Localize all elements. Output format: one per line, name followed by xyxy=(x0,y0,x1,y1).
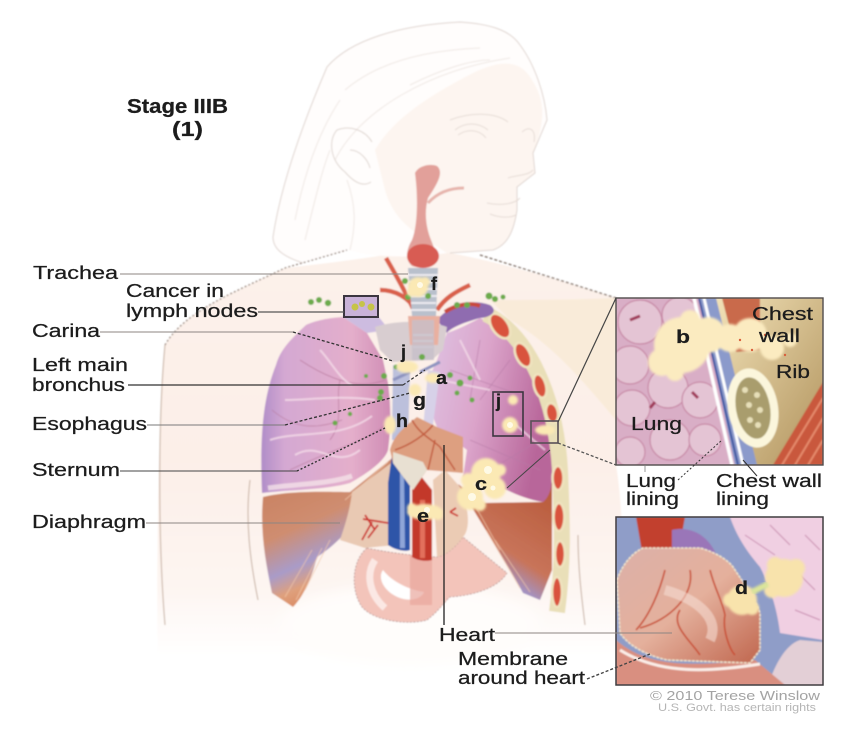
copyright credit xyxy=(650,688,821,714)
tumor b xyxy=(648,310,797,381)
tumor site letters: b xyxy=(676,327,690,347)
anatomy labels, bottom and right: Lung xyxy=(631,414,682,434)
anatomy labels, left column: Carina xyxy=(32,321,101,341)
diaphragm, left side xyxy=(262,455,396,607)
left lung apex vessels xyxy=(343,302,388,333)
vena cava xyxy=(388,455,410,551)
chest wall lining xyxy=(700,298,757,465)
tumors: cream-yellow cancer clusters xyxy=(384,277,555,520)
tumor site letters: d xyxy=(735,578,748,598)
leader lines xyxy=(100,274,757,679)
heading: Stage IIIB (1): (1) xyxy=(172,119,203,141)
rib muscle xyxy=(773,382,823,465)
body silhouette xyxy=(157,250,623,670)
anatomy labels, bottom and right: Rib xyxy=(776,362,810,382)
anatomy labels, left column: Trachea xyxy=(33,263,119,283)
shoulder and arm outlines xyxy=(165,250,347,345)
inset panel: heart invasion xyxy=(616,517,823,685)
shoulder highlight xyxy=(490,298,616,420)
tumor site letters: j xyxy=(495,391,501,411)
heart muscle xyxy=(617,548,760,663)
blood vessels near stomach xyxy=(362,508,458,540)
anatomy labels, bottom and right: around heart xyxy=(458,668,585,688)
anatomy labels, left column: lymph nodes xyxy=(126,301,258,321)
tumor site letters xyxy=(396,274,748,598)
anatomy labels, left column: Esophagus xyxy=(32,414,147,434)
head: hair and face xyxy=(273,22,547,263)
eye and nose xyxy=(450,114,534,217)
inset panel: chest wall invasion xyxy=(611,297,823,467)
right lung xyxy=(427,318,552,502)
tan chest wall xyxy=(716,298,823,465)
lung tissue xyxy=(616,298,736,464)
upper vessels over right apex xyxy=(437,302,494,333)
anatomy labels, left column: Diaphragm xyxy=(32,512,146,532)
lung tissue xyxy=(730,517,823,640)
diaphragm, right side xyxy=(458,477,552,600)
vessel background xyxy=(616,517,823,685)
tumor site letters: f xyxy=(431,274,438,294)
diaphragm xyxy=(616,640,785,685)
anatomy labels, bottom and right: lining xyxy=(716,489,769,509)
anatomy labels, bottom and right: Chest wall xyxy=(716,471,822,491)
anatomy labels, left column: Sternum xyxy=(32,460,120,480)
ear xyxy=(332,128,372,184)
tumor site letters: e xyxy=(417,506,429,526)
anatomy labels, bottom and right: Heart xyxy=(439,625,495,645)
heading: Stage IIIB (1): Stage IIIB xyxy=(127,96,228,118)
illustration: woman's torso with lungs xyxy=(157,22,623,670)
anatomy labels, left column: bronchus xyxy=(32,375,125,395)
green lymph nodes xyxy=(308,278,506,426)
anatomy labels, left column xyxy=(32,263,258,532)
anatomy labels, bottom and right xyxy=(439,304,822,688)
tumor site letters: g xyxy=(413,390,426,410)
carotid arteries xyxy=(380,258,470,320)
lower lung lobe xyxy=(768,640,823,685)
throat and larynx xyxy=(407,165,464,268)
mediastinum lobes xyxy=(375,322,447,362)
heart xyxy=(390,417,463,490)
esophagus and bronchi xyxy=(392,365,410,440)
pale lower abdomen xyxy=(280,585,540,665)
ribs along chest wall xyxy=(485,310,565,612)
box: lung tumor j xyxy=(493,392,523,436)
tumor site letters: j xyxy=(400,342,406,362)
lymph node inset box xyxy=(344,296,378,317)
box: chest wall tumor b xyxy=(531,421,558,443)
tumor site letters: h xyxy=(396,411,408,431)
abdominal cavity xyxy=(340,458,398,548)
anatomy labels, bottom and right: Chest xyxy=(752,304,813,324)
lung lining stripes xyxy=(694,298,732,465)
intercostal muscle xyxy=(722,298,760,352)
aorta xyxy=(412,475,432,561)
rib bone xyxy=(726,368,780,448)
aorta xyxy=(636,517,685,552)
heading: Stage IIIB (1) xyxy=(127,96,228,141)
anatomy labels, bottom and right: Lung xyxy=(626,471,676,491)
anatomy labels, bottom and right: lining xyxy=(626,489,679,509)
copyright credit: © 2010 Terese Winslow xyxy=(650,688,821,703)
stomach xyxy=(354,537,507,622)
anatomy labels, left column: Left main xyxy=(32,355,128,375)
anatomy labels, bottom and right: wall xyxy=(758,326,800,346)
tumor site letters: a xyxy=(436,368,448,388)
anatomy labels, bottom and right: Membrane xyxy=(458,649,568,669)
copyright credit: U.S. Govt. has certain rights xyxy=(658,702,817,714)
purple vessels xyxy=(670,528,716,554)
tumor d xyxy=(723,557,805,615)
aortic arch xyxy=(408,316,440,345)
trachea xyxy=(408,268,438,316)
left lung xyxy=(261,317,390,493)
tumor site letters: c xyxy=(475,474,487,494)
anatomy labels, left column: Cancer in xyxy=(126,281,224,301)
